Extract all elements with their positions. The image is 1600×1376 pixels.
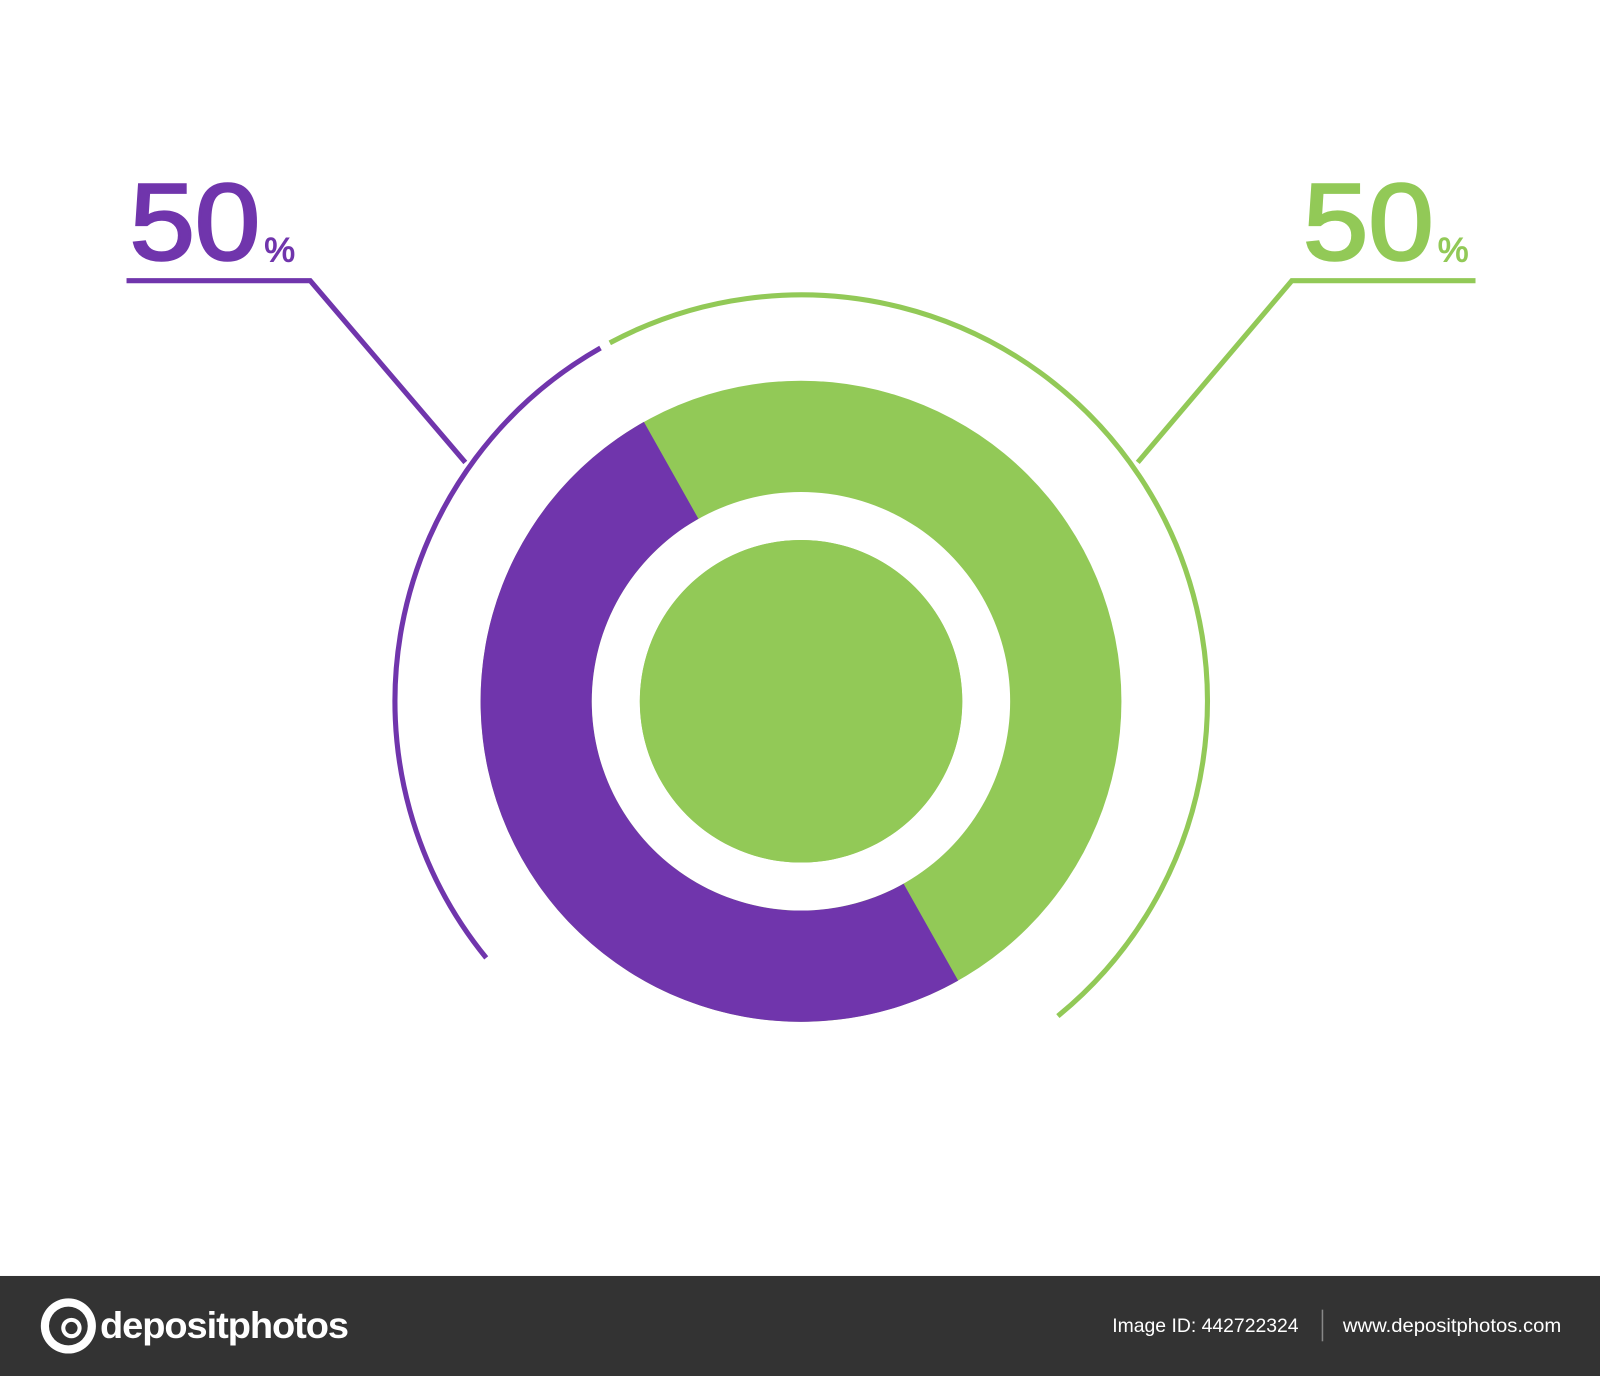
- footer brand: depositphotos: [100, 1305, 348, 1346]
- outer arc: purple: [395, 348, 601, 958]
- callout: purple 50%: %: [264, 231, 295, 269]
- center green circle: [640, 540, 962, 863]
- callout: green 50%: [1138, 161, 1476, 462]
- callout: purple 50%: 50: [130, 161, 260, 282]
- callout: green 50%: %: [1438, 231, 1469, 269]
- callout: green 50%: 50: [1303, 161, 1434, 282]
- outer arc: green: [610, 295, 1207, 1016]
- callout: purple 50%: [127, 161, 465, 462]
- donut chart: [481, 381, 1121, 1022]
- inner white ring: [592, 492, 1010, 911]
- footer image id: Image ID: 442722324: [1112, 1315, 1299, 1337]
- footer bar: [0, 1276, 1600, 1376]
- footer url: www.depositphotos.com: [1342, 1315, 1561, 1337]
- icon: camera logo: [41, 1298, 96, 1354]
